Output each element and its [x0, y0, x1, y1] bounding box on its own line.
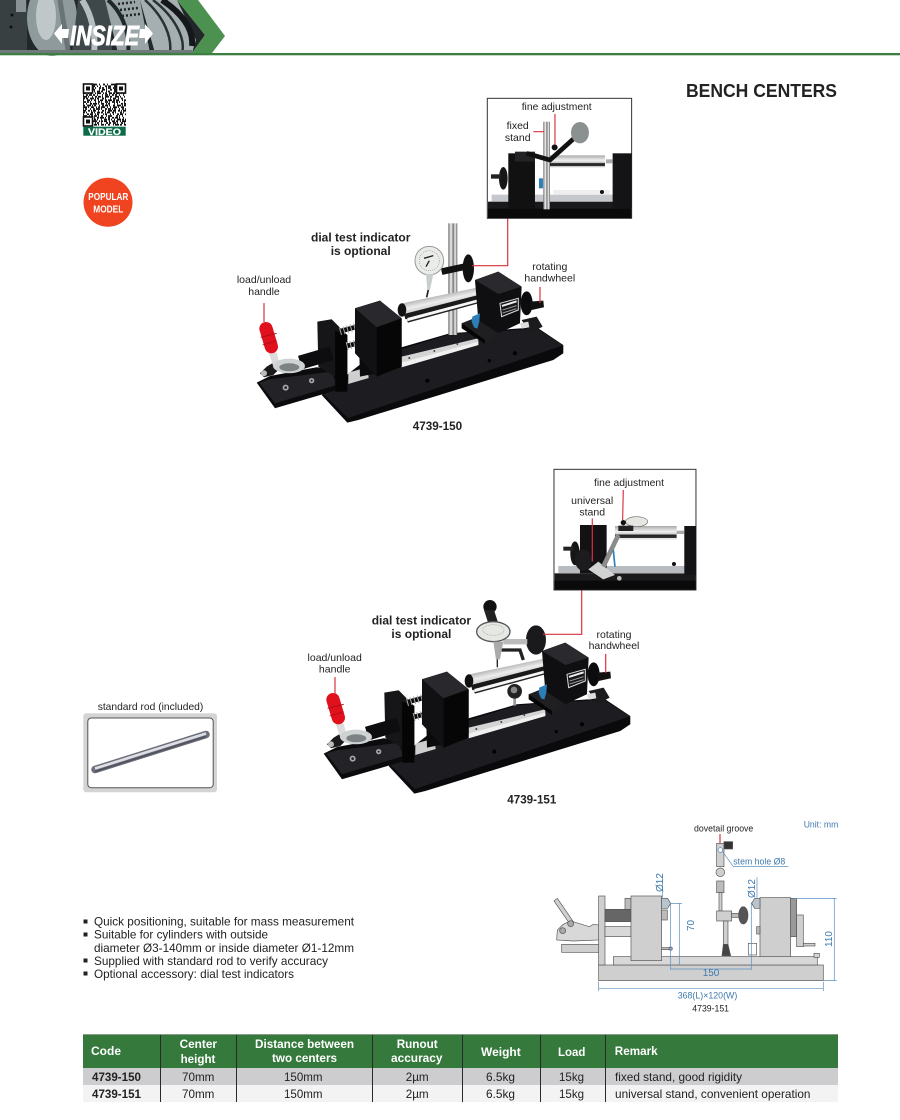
- badge: popular model: [84, 178, 132, 227]
- title: BENCH CENTERS: [686, 81, 837, 101]
- row: 4739-151: 6.5kg: [486, 1087, 515, 1101]
- label: load/unload handle: load/unload: [308, 652, 362, 664]
- row: 4739-151: 2µm: [406, 1087, 429, 1101]
- red marker: dovetail groove: [719, 834, 721, 843]
- row: 4739-151: [83, 1085, 838, 1102]
- table header row: Remark: [615, 1044, 658, 1058]
- label: rotating handwheel: rotating: [532, 261, 567, 273]
- feature bullet list: Optional accessory: dial test indicators: [94, 967, 294, 981]
- QR code with video tag: [83, 84, 126, 138]
- dimension lines: [599, 852, 837, 991]
- label: dial test indicator is optional: is optional: [391, 627, 451, 641]
- inset photo: universal stand detail: [554, 469, 696, 590]
- label: load/unload handle: handle: [248, 286, 280, 298]
- label: height 110: 110: [824, 931, 835, 947]
- label: span 150: 150: [703, 968, 720, 979]
- label: stem hole: stem hole Ø8: [733, 856, 785, 867]
- dimension drawing: [554, 820, 838, 1015]
- table header row: Weight: [481, 1045, 521, 1059]
- row: 4739-150: 70mm: [182, 1070, 214, 1084]
- label: dial test indicator is optional: is optional: [331, 244, 391, 258]
- label: diameter left: Ø12: [655, 873, 666, 892]
- label: overall size: 368(L)×120(W): [678, 991, 737, 1002]
- label: fine adjustment: fine adjustment: [522, 101, 592, 113]
- leader lines: [264, 287, 540, 322]
- feature bullet list: [84, 914, 355, 981]
- icon: steel rod: [95, 734, 206, 772]
- row: 4739-151: 4739-151: [92, 1087, 141, 1101]
- label: center height 70: 70: [686, 919, 697, 931]
- label: load/unload handle: handle: [319, 664, 351, 676]
- product photo: 4739-150 bench center: [257, 223, 563, 423]
- row: 4739-151: 150mm: [284, 1087, 323, 1101]
- row: 4739-150: 150mm: [284, 1070, 323, 1084]
- table header row: Distance between: [255, 1037, 354, 1051]
- fixed stand rods: [448, 223, 457, 335]
- row: 4739-150: fixed stand, good rigidity: [615, 1070, 742, 1084]
- row: 4739-150: 15kg: [559, 1070, 584, 1084]
- table header row: two centers: [272, 1051, 337, 1065]
- header photo: [0, 0, 205, 56]
- badge: popular model: POPULAR: [88, 191, 129, 203]
- model code: 4739-150: [413, 419, 463, 433]
- feature bullet list: Supplied with standard rod to verify accuracy: [94, 954, 328, 968]
- dial test indicator: [415, 246, 474, 297]
- row: 4739-150: 6.5kg: [486, 1070, 515, 1084]
- callouts for 4739-151: [308, 477, 664, 806]
- label: dial test indicator is optional: dial test indicator: [311, 231, 411, 245]
- red leader from dial knob to inset: [472, 218, 508, 266]
- logo: INSIZE: INSIZE: [70, 20, 140, 51]
- table header row: accuracy: [391, 1051, 443, 1065]
- label: fine adjustment: fine adjustment: [594, 477, 664, 489]
- table header row: Load: [558, 1045, 585, 1059]
- product photo: 4739-151 bench center: [324, 643, 630, 794]
- leader lines: [335, 654, 606, 694]
- row: 4739-150: 2µm: [406, 1070, 429, 1084]
- label: universal stand: stand: [579, 506, 605, 518]
- standard rod panel: [83, 701, 217, 792]
- row: 4739-151: 15kg: [559, 1087, 584, 1101]
- dial indicator on universal stand: [477, 600, 546, 667]
- label: unit: Unit: mm: [804, 820, 838, 831]
- table header row: height: [181, 1052, 215, 1066]
- green header rule: [0, 53, 900, 55]
- badge: popular model: MODEL: [93, 203, 124, 215]
- label: rotating handwheel: handwheel: [524, 272, 575, 284]
- inset photo: fixed stand detail: [487, 98, 632, 218]
- row: 4739-151: universal stand, convenient operation: [615, 1087, 810, 1101]
- label: load/unload handle: load/unload: [237, 274, 291, 286]
- feature bullet list: diameter Ø3-140mm or inside diameter Ø1-12mm: [94, 941, 354, 955]
- feature bullet list: Quick positioning, suitable for mass measurement: [94, 914, 355, 928]
- label: drawing model code: 4739-151: [692, 1004, 729, 1015]
- label: universal stand: universal: [571, 495, 613, 507]
- red leader from knob to inset: [543, 590, 582, 634]
- label: rotating handwheel: handwheel: [589, 640, 639, 652]
- label: dovetail groove: dovetail groove: [694, 824, 753, 834]
- rod caption: standard rod (included): [98, 701, 203, 713]
- row: 4739-150: [83, 1068, 838, 1085]
- table header row: [83, 1034, 838, 1068]
- table header row: Center: [180, 1037, 217, 1051]
- row: 4739-151: 70mm: [182, 1087, 214, 1101]
- QR code with video tag: VIDEO: [88, 127, 121, 138]
- header banner: [0, 0, 900, 56]
- drawing geometry: [554, 842, 823, 981]
- callouts for 4739-150: [237, 101, 592, 433]
- universal stand: [507, 684, 522, 706]
- feature bullet list: Suitable for cylinders with outside: [94, 928, 268, 942]
- green chevron: [177, 0, 225, 53]
- table header row: Runout: [397, 1037, 438, 1051]
- specification table: [83, 1034, 838, 1102]
- row: 4739-150: 4739-150: [92, 1070, 141, 1084]
- table header row: Code: [91, 1044, 121, 1058]
- label: diameter right: Ø12: [747, 879, 758, 898]
- model code: 4739-151: [507, 792, 557, 806]
- label: rotating handwheel: rotating: [596, 629, 632, 641]
- label: fixed stand: stand: [505, 132, 531, 144]
- label: dial test indicator is optional: dial test indicator: [372, 614, 471, 628]
- label: fixed stand: fixed: [507, 120, 529, 132]
